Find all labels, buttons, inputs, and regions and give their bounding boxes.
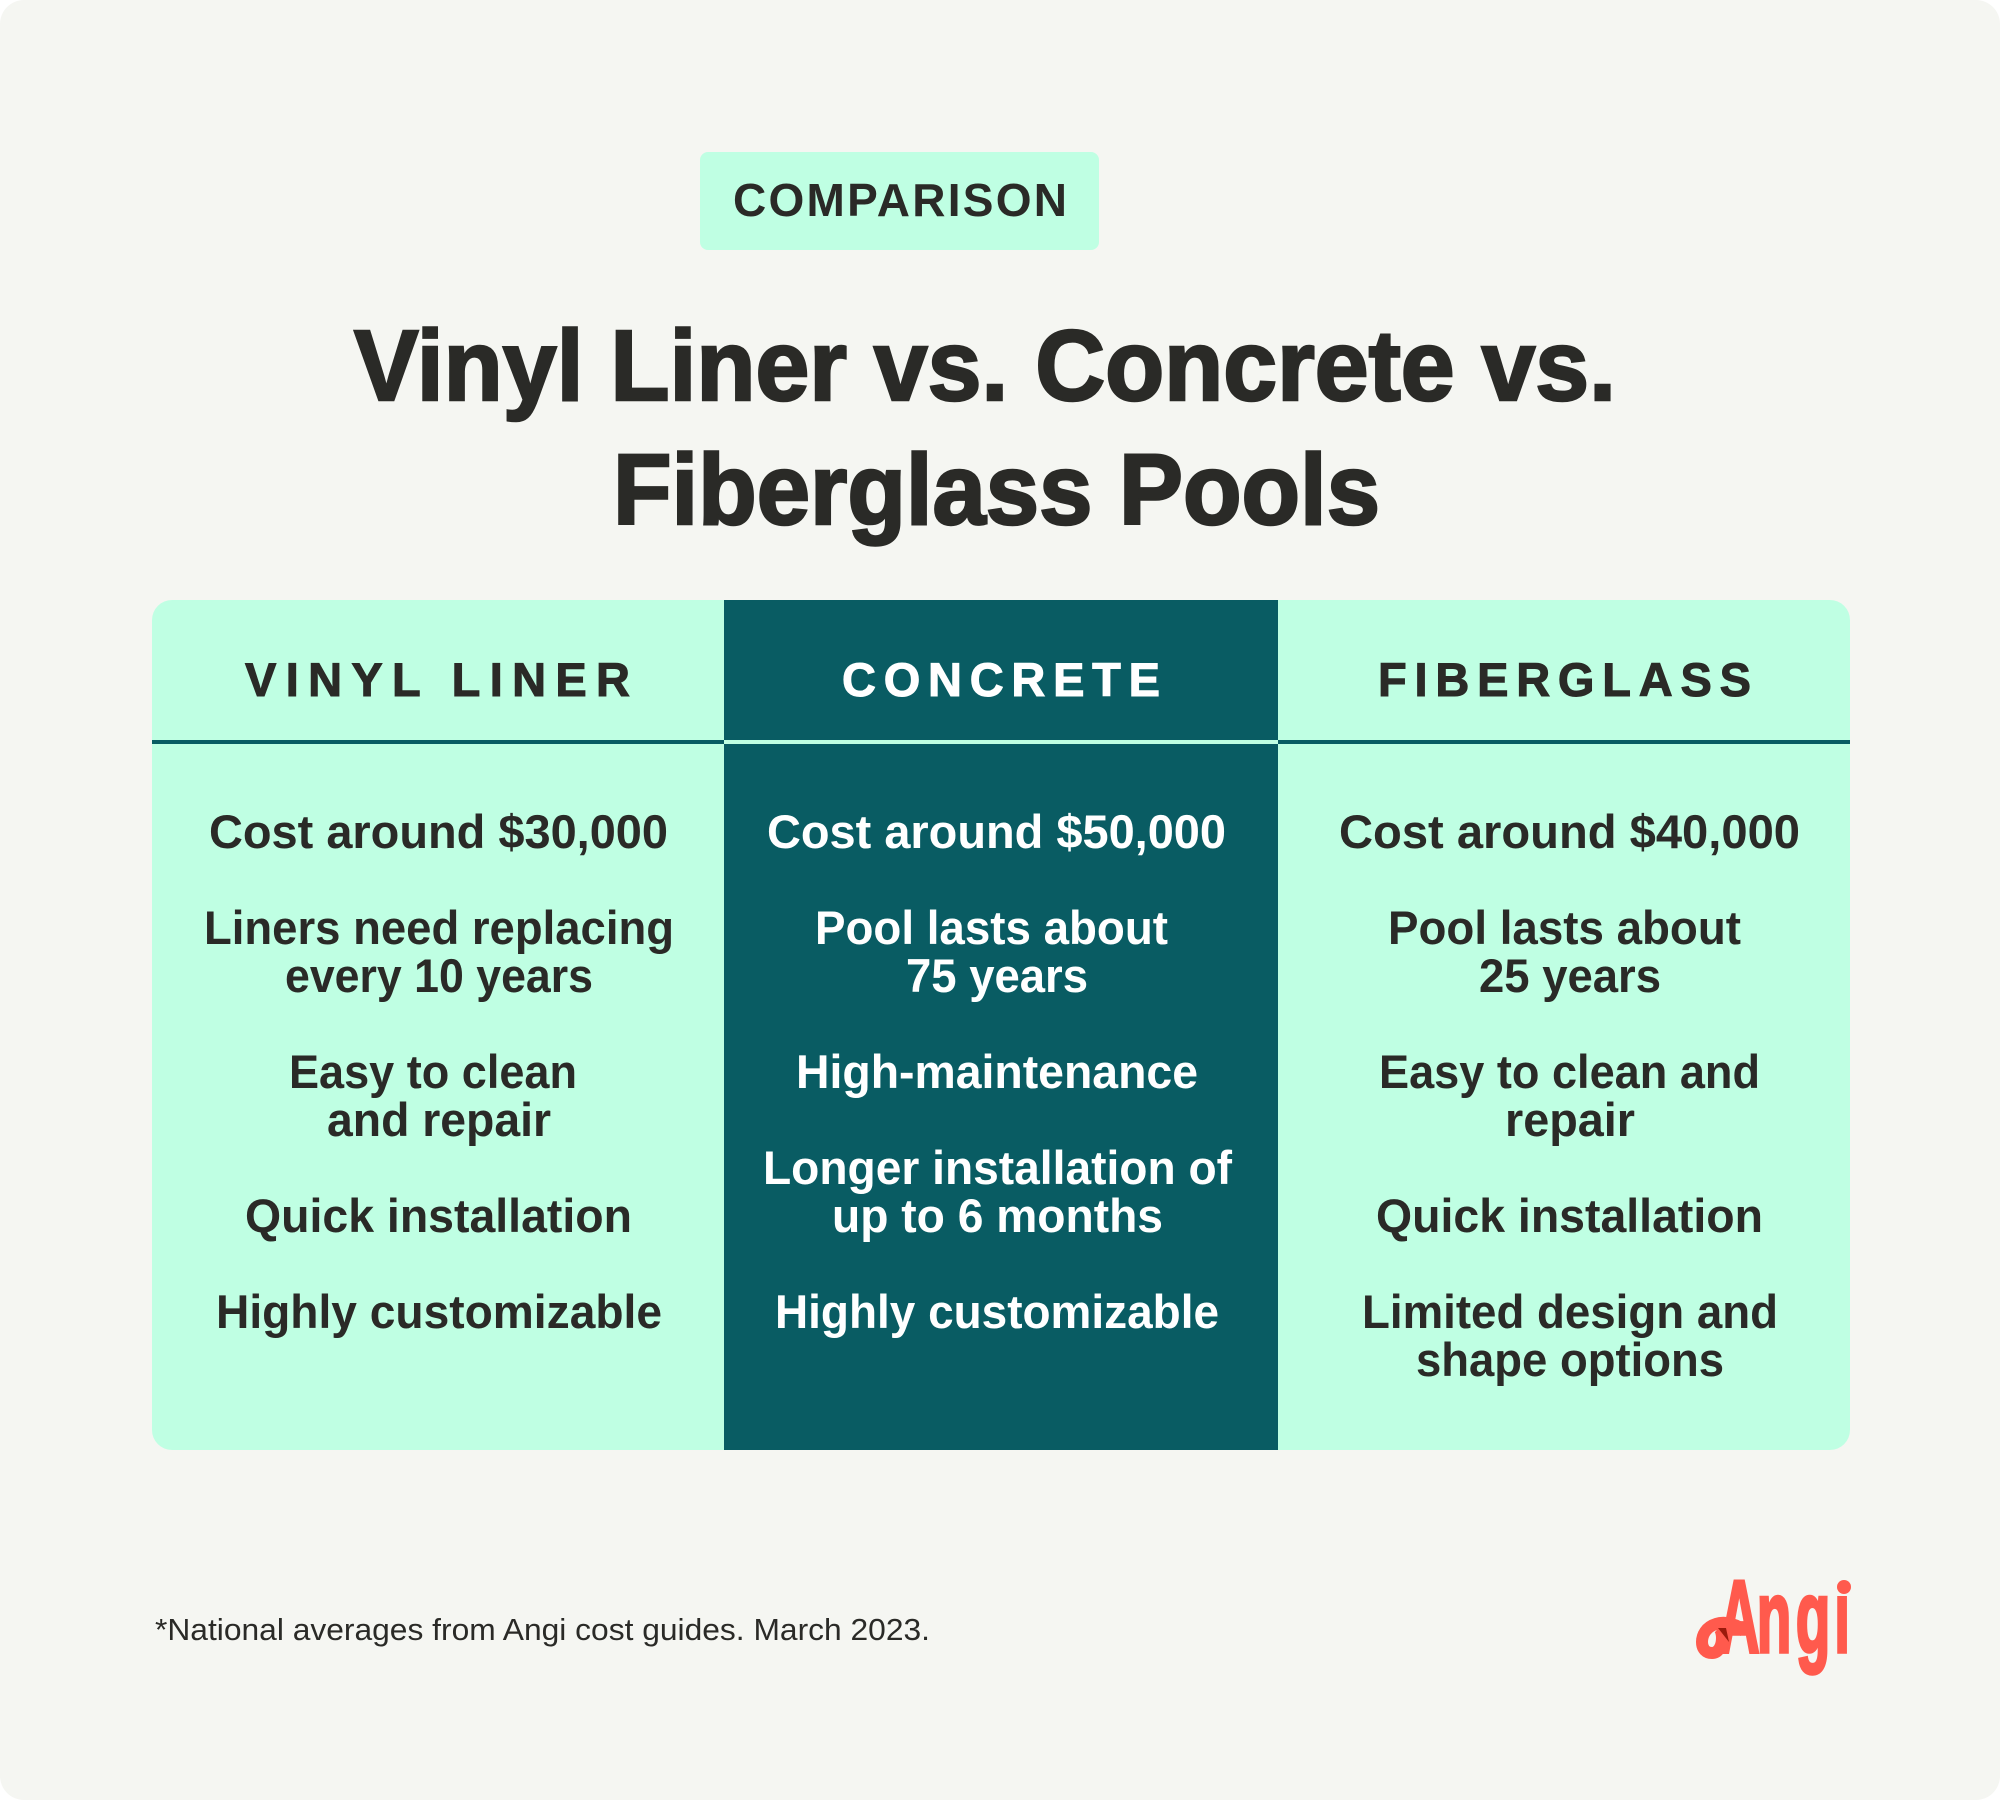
maintenance: vinyl liner: and repair <box>327 1093 551 1146</box>
category badge <box>700 152 1099 250</box>
title <box>354 310 1616 546</box>
design: concrete: Highly customizable <box>775 1285 1219 1338</box>
lifespan: fiberglass <box>1388 901 1741 1002</box>
panel: concrete column <box>724 600 1278 1450</box>
lifespan: concrete: 75 years <box>906 949 1088 1002</box>
title: Vinyl Liner vs. Concrete vs. <box>354 310 1616 422</box>
heading: vinyl liner: VINYL LINER <box>245 653 630 706</box>
installation: concrete: Longer installation of <box>763 1141 1232 1194</box>
design: vinyl liner: Highly customizable <box>216 1285 662 1338</box>
panel: vinyl liner column <box>152 600 724 1450</box>
installation: concrete: up to 6 months <box>832 1189 1163 1242</box>
panel: fiberglass column <box>1278 600 1850 1450</box>
maintenance: fiberglass: Easy to clean and <box>1379 1045 1760 1098</box>
lifespan: vinyl liner: every 10 years <box>285 949 593 1002</box>
design: fiberglass: shape options <box>1416 1333 1724 1386</box>
maintenance: vinyl liner: Easy to clean <box>289 1045 577 1098</box>
lifespan: vinyl liner <box>204 901 674 1002</box>
installation: concrete <box>763 1141 1232 1242</box>
cost: fiberglass: Cost around $40,000 <box>1339 805 1800 858</box>
maintenance: fiberglass <box>1379 1045 1760 1146</box>
heading: concrete: CONCRETE <box>842 653 1160 706</box>
design: fiberglass: Limited design and <box>1362 1285 1778 1338</box>
lifespan: concrete: Pool lasts about <box>815 901 1168 954</box>
lifespan: concrete <box>815 901 1168 1002</box>
installation: fiberglass: Quick installation <box>1376 1189 1763 1242</box>
category badge: COMPARISON <box>733 174 1067 226</box>
heading: fiberglass: FIBERGLASS <box>1378 653 1751 706</box>
title: Fiberglass Pools <box>613 434 1380 546</box>
maintenance: vinyl liner <box>289 1045 577 1146</box>
design: fiberglass <box>1362 1285 1778 1386</box>
lifespan: fiberglass: 25 years <box>1479 949 1661 1002</box>
maintenance: fiberglass: repair <box>1505 1093 1635 1146</box>
logo: Angi: Angi <box>1719 1559 1850 1674</box>
comparison table <box>152 600 1850 1450</box>
footnote: *National averages from Angi cost guides. March 2023. <box>155 1612 930 1647</box>
lifespan: fiberglass: Pool lasts about <box>1388 901 1741 954</box>
cost: concrete: Cost around $50,000 <box>767 805 1226 858</box>
maintenance: concrete: High-maintenance <box>796 1045 1198 1098</box>
lifespan: vinyl liner: Liners need replacing <box>204 901 674 954</box>
cost: vinyl liner: Cost around $30,000 <box>209 805 668 858</box>
installation: vinyl liner: Quick installation <box>245 1189 632 1242</box>
